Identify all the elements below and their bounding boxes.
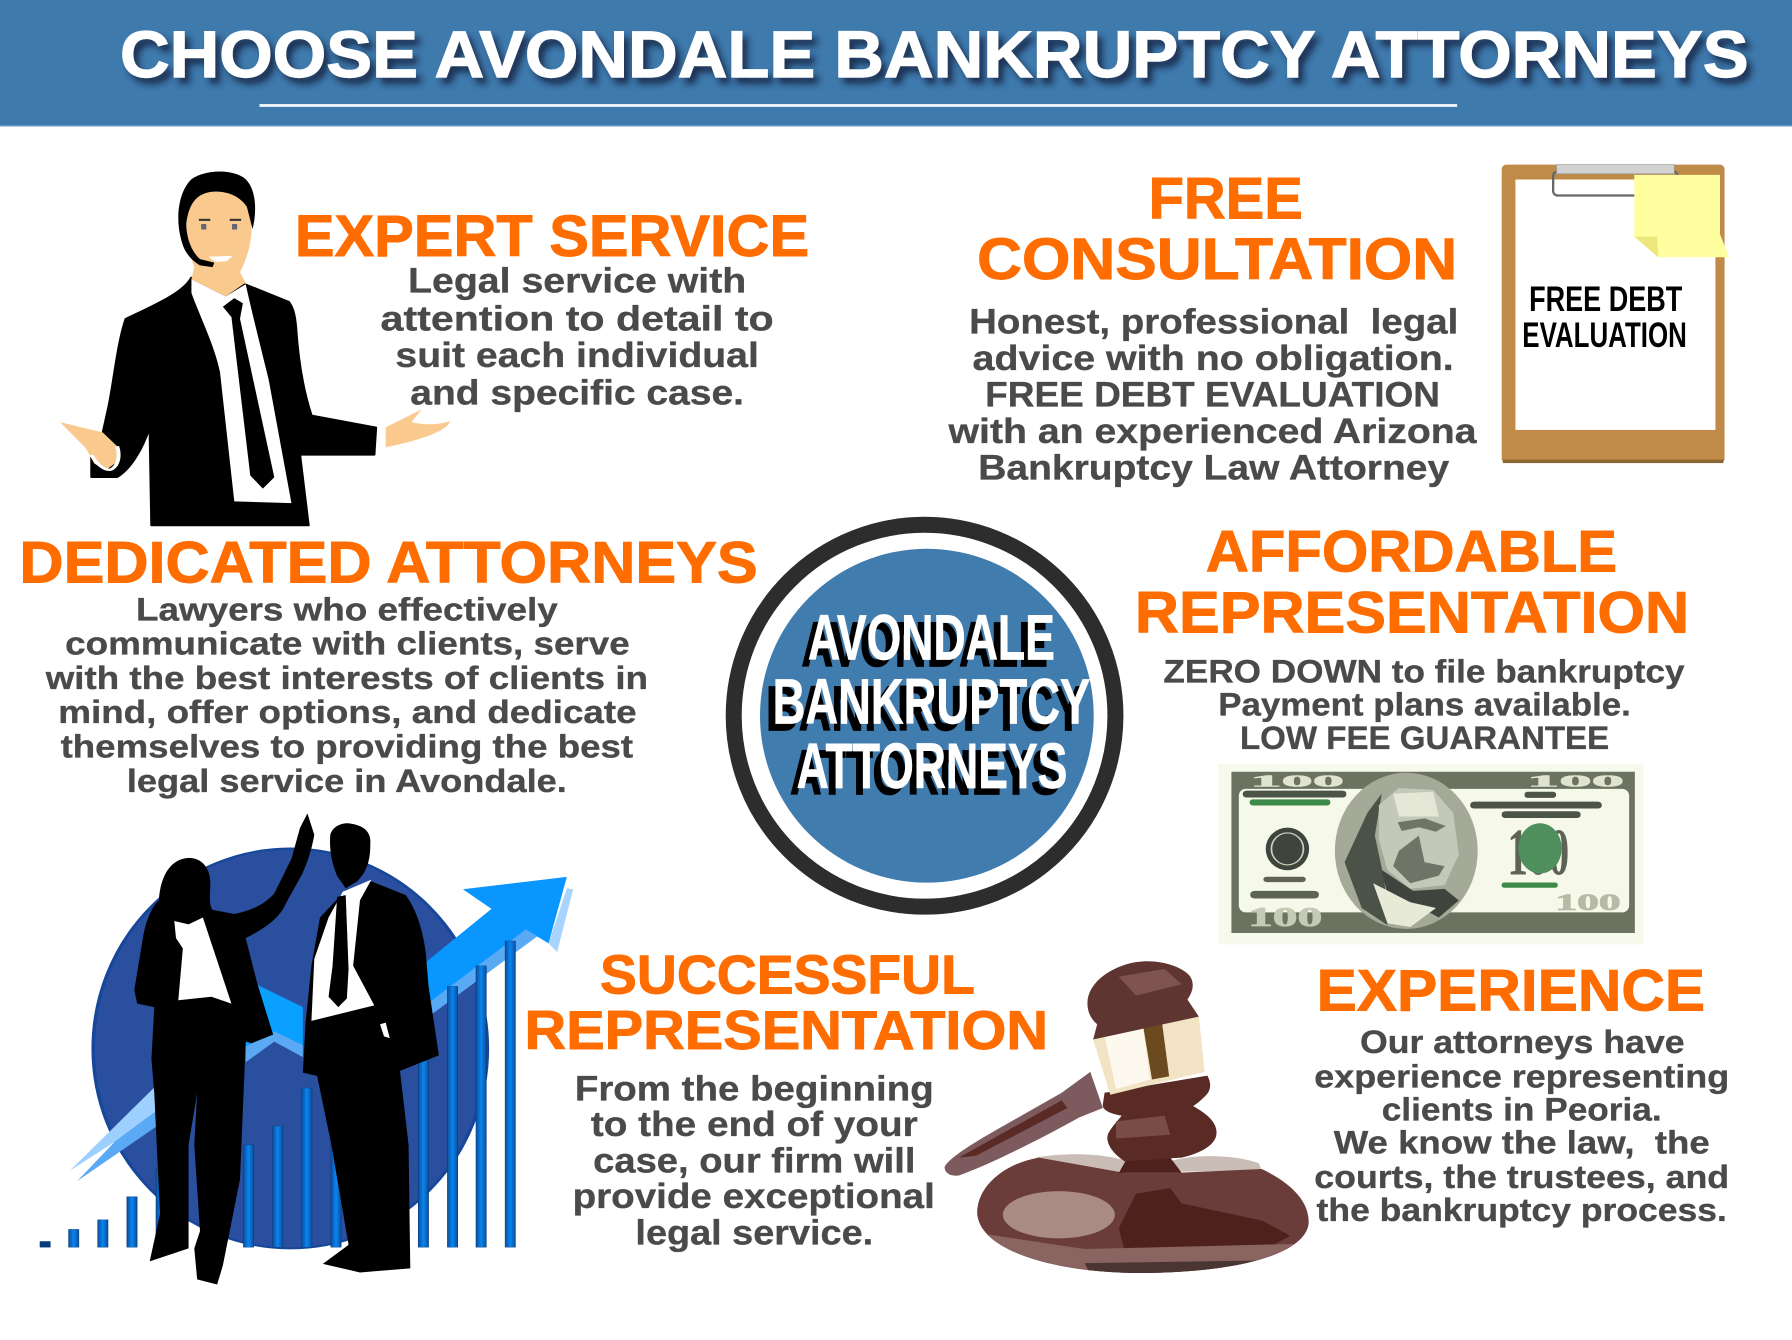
panel: expert service <box>295 204 809 413</box>
badge shadow text: AVONDALE <box>801 609 1048 681</box>
text block: Lawyers who effectively <box>136 591 558 627</box>
text block <box>1163 654 1685 756</box>
text block: themselves to providing the best <box>61 728 633 764</box>
text block <box>45 591 648 799</box>
bill numerals: 100 <box>1527 772 1624 791</box>
icon: clipboard <box>1502 165 1729 463</box>
badge text: BANKRUPTCY <box>773 666 1090 738</box>
heading: REPRESENTATION <box>525 999 1048 1061</box>
icon: hundred dollar bill <box>1218 764 1643 944</box>
text block <box>947 301 1477 488</box>
text block: suit each individual <box>395 335 759 375</box>
text block <box>1314 1024 1729 1228</box>
heading: FREE <box>1149 166 1303 231</box>
text block: experience representing <box>1314 1058 1729 1094</box>
text block: FREE DEBT EVALUATION <box>985 374 1440 414</box>
badge shadow text <box>766 609 1083 809</box>
text block: Bankruptcy Law Attorney <box>978 448 1449 488</box>
text block: legal service in Avondale. <box>127 763 567 799</box>
text block: to the end of your <box>591 1104 918 1144</box>
icon: gavel <box>945 961 1319 1281</box>
heading: EXPERIENCE <box>1317 959 1705 1024</box>
heading <box>977 166 1457 292</box>
text block: courts, the trustees, and <box>1314 1159 1729 1195</box>
chart bars <box>40 941 515 1247</box>
text block: case, our firm will <box>593 1140 915 1181</box>
panel: free consultation <box>947 166 1477 488</box>
badge shadow text: BANKRUPTCY <box>766 673 1083 745</box>
heading <box>525 944 1048 1061</box>
title: CHOOSE AVONDALE BANKRUPTCY ATTORNEYS <box>120 18 1749 92</box>
badge text <box>773 602 1090 802</box>
icon: businessman with headset <box>60 171 450 526</box>
header banner <box>0 0 1792 127</box>
bill numerals <box>1248 772 1624 932</box>
bill numerals: 100 <box>1250 772 1344 791</box>
icon: business people with rising chart <box>40 813 573 1285</box>
clipboard label: FREE DEBT <box>1529 279 1683 319</box>
bill numerals: 100 <box>1555 890 1621 915</box>
center badge <box>734 525 1115 907</box>
silhouette: man <box>303 823 439 1272</box>
text block: legal service. <box>635 1213 873 1253</box>
heading: CONSULTATION <box>977 227 1457 292</box>
text block <box>573 1068 935 1253</box>
text block: Honest, professional legal <box>969 301 1458 341</box>
panel: experience <box>1314 959 1729 1228</box>
badge text: AVONDALE <box>808 602 1055 674</box>
clipboard label: EVALUATION <box>1522 315 1687 355</box>
text block: clients in Peoria. <box>1382 1091 1662 1127</box>
heading: EXPERT SERVICE <box>295 204 809 269</box>
clipboard label <box>1522 279 1687 355</box>
heading: SUCCESSFUL <box>600 944 975 1006</box>
panel: affordable representation <box>1135 520 1689 756</box>
panel: dedicated attorneys <box>19 531 758 799</box>
heading: REPRESENTATION <box>1135 580 1689 645</box>
text block: ZERO DOWN to file bankruptcy <box>1163 654 1685 690</box>
text block <box>381 261 774 413</box>
text block: LOW FEE GUARANTEE <box>1240 720 1609 756</box>
bill numerals: 100 <box>1248 902 1322 932</box>
text block: the bankruptcy process. <box>1317 1192 1727 1228</box>
heading: DEDICATED ATTORNEYS <box>19 531 758 596</box>
text block: We know the law, the <box>1334 1125 1710 1161</box>
text block: with the best interests of clients in <box>45 660 648 696</box>
text block: advice with no obligation. <box>973 338 1454 378</box>
panel: successful representation <box>525 944 1048 1253</box>
badge text: ATTORNEYS <box>797 730 1067 802</box>
bill numerals: 100 <box>1507 817 1569 890</box>
text block: From the beginning <box>575 1068 934 1108</box>
text block: Payment plans available. <box>1218 687 1631 723</box>
text block: with an experienced Arizona <box>947 411 1477 451</box>
text block: Legal service with <box>408 261 746 301</box>
heading <box>1135 520 1689 645</box>
text block: Our attorneys have <box>1360 1024 1685 1060</box>
text block: communicate with clients, serve <box>65 626 630 662</box>
text block: and specific case. <box>410 373 744 413</box>
text block: mind, offer options, and dedicate <box>58 694 637 730</box>
badge shadow text: ATTORNEYS <box>790 737 1061 809</box>
silhouette: woman <box>134 813 314 1285</box>
text block: attention to detail to <box>381 298 774 338</box>
heading: AFFORDABLE <box>1206 520 1617 585</box>
text block: provide exceptional <box>573 1176 935 1216</box>
